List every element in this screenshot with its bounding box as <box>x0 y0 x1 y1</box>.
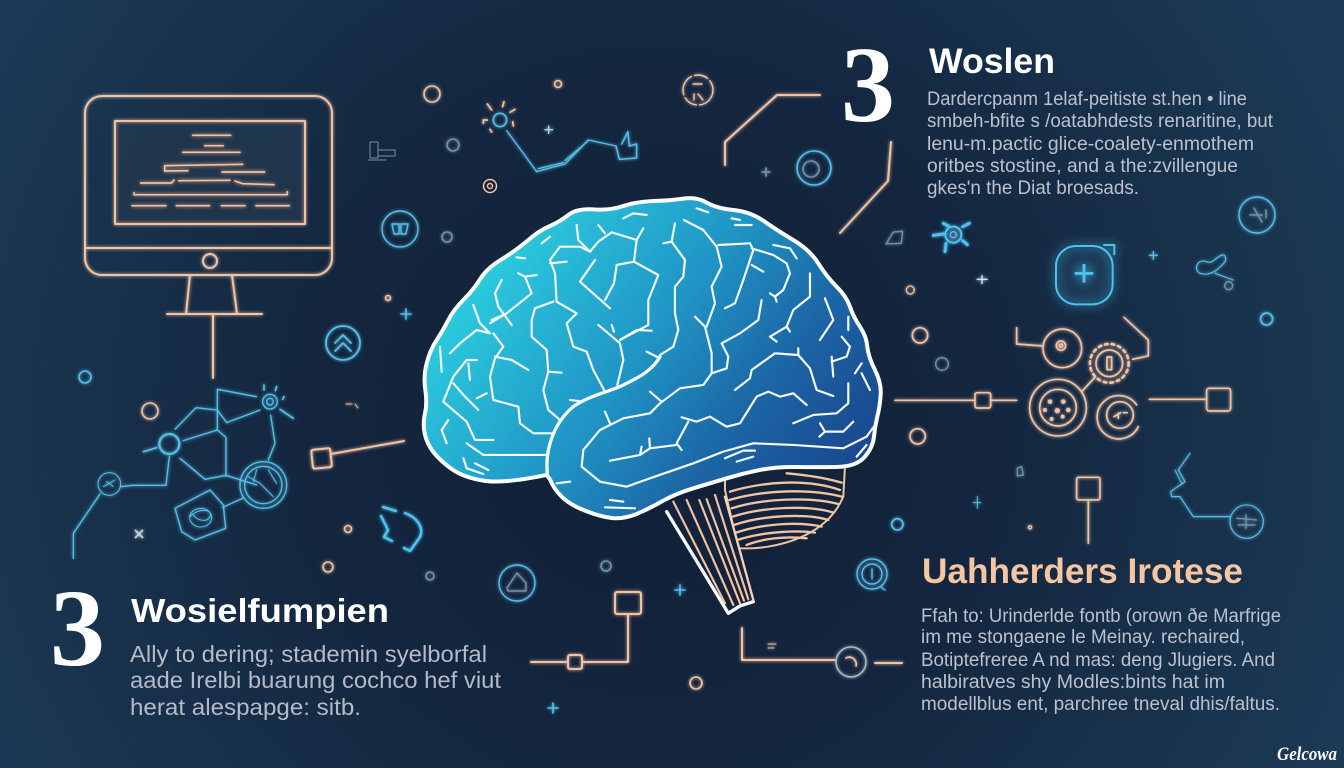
icon: peach spiral <box>484 180 496 192</box>
text block: bottom right: Ffah to: Urinderlde fontb (orown ðe Marfrige <box>921 606 1281 627</box>
watermark: Gelcowa <box>1277 744 1337 765</box>
top right angled connector lines <box>725 95 891 233</box>
right side nodes and connected circles diagram <box>895 317 1231 543</box>
text block: top right: oritbes stostine, and a the:zvillengue <box>927 156 1238 177</box>
brain illustration <box>424 198 881 613</box>
text block: bottom left: Ally to dering; stademin syelborfal <box>130 641 487 667</box>
icon: info lens <box>857 559 887 590</box>
small decorative nodes, left and center <box>79 80 776 713</box>
icon: peach badge <box>683 75 713 105</box>
brainstem <box>667 495 753 613</box>
icon: top right outlined badge <box>1239 197 1275 233</box>
icon: bottom target node <box>836 647 866 677</box>
heading: bottom right: Uahherders Irotese <box>922 552 1243 591</box>
text block: bottom right: halbiratves shy Modles:bints hat im <box>921 672 1225 693</box>
heading: bottom left: Wosielfumpien <box>131 592 389 629</box>
text block: bottom right: modellblus ent, parchree tneval dhis/faltus. <box>921 694 1280 715</box>
numeral: bottom left: 3 <box>50 567 105 689</box>
numeral: top right: 3 <box>841 26 895 145</box>
text block: top right: smbeh-bfite s /oatabhdests renaritine, but <box>927 111 1274 132</box>
right scattered icons and dots <box>886 231 1273 538</box>
icon: plus button <box>1056 245 1114 304</box>
cerebrum outline <box>424 198 881 518</box>
icon: book badge <box>382 211 418 247</box>
icon: computer monitor <box>85 96 332 378</box>
cerebellum <box>725 467 845 548</box>
text block: bottom left: aade Irelbi buarung cochco hef viut <box>130 667 502 693</box>
idea constellation with thumbs up <box>483 102 637 172</box>
text block: top right: Dardercpanm 1elaf-peitiste st.hen • line <box>927 89 1247 110</box>
brain folds <box>440 208 875 508</box>
text block: bottom left <box>130 641 502 720</box>
heading: top right: Woslen <box>929 42 1055 81</box>
text block: top right <box>927 89 1274 199</box>
bottom connector lines with square nodes <box>531 592 902 669</box>
text block: bottom right: im me stongaene le Meinay. rechaired, <box>921 627 1245 648</box>
icon: blue target circle <box>762 151 831 185</box>
text block: top right: gkes'n the Diat broesads. <box>927 178 1139 199</box>
left connector with square node <box>311 441 404 469</box>
text block: bottom right: Botiptefreree A nd mas: deng Jlugiers. And <box>921 650 1275 671</box>
icon: blue glowing phone glyph <box>381 507 421 551</box>
icon: house badge <box>499 565 535 601</box>
text block: bottom right <box>921 606 1281 715</box>
left network diagram <box>73 385 293 558</box>
icon: gray figure <box>368 142 395 160</box>
icon: glowing gear <box>933 223 969 252</box>
text block: bottom left: herat alespapge: sitb. <box>130 694 361 720</box>
icon: chevrons badge <box>326 326 360 360</box>
text block: top right: lenu-m.pactic glice-coalety-enmothem <box>927 134 1254 155</box>
